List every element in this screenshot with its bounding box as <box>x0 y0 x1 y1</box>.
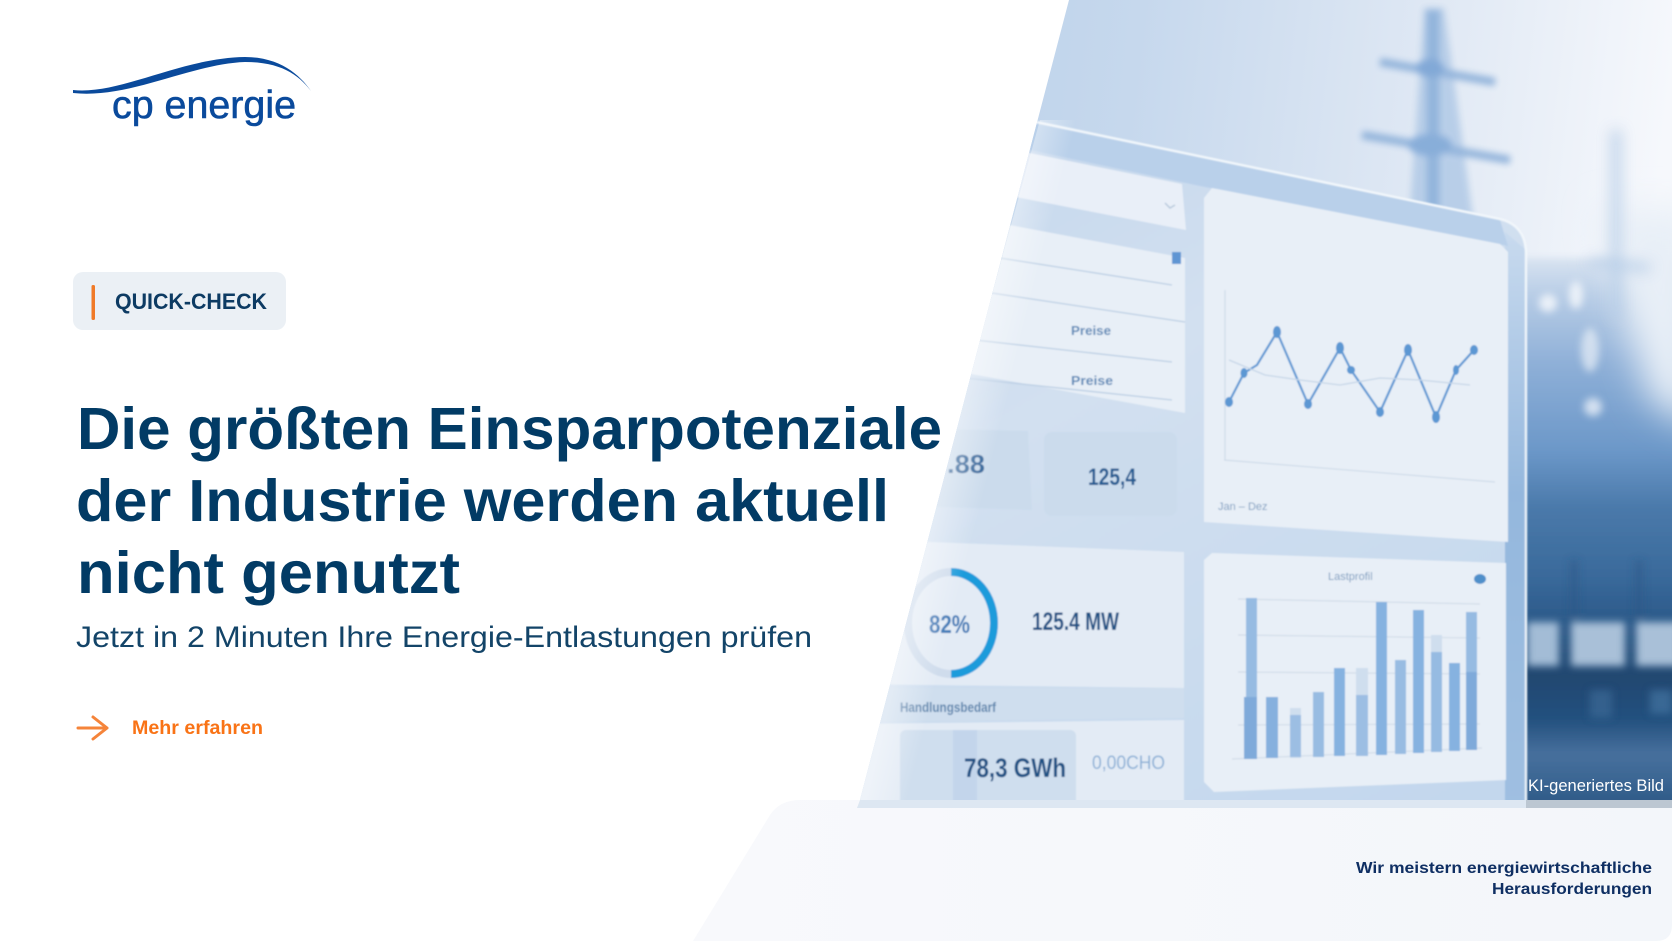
panel: gauge <box>890 542 1184 688</box>
chart title: Lastprofil <box>1328 571 1373 583</box>
panel: top left <box>1018 152 1186 230</box>
gauge ring <box>908 572 994 674</box>
dashboard <box>840 118 1526 812</box>
left edge fade <box>860 120 1062 800</box>
panel: list <box>972 224 1186 413</box>
title: nicht genutzt <box>77 540 460 606</box>
screen highlight edge <box>1036 122 1526 812</box>
photo bottom translucent strip <box>857 800 1672 808</box>
chart toggle <box>1474 574 1486 584</box>
metric: power: 125.4 MW <box>1032 608 1119 636</box>
title: Die größten Einsparpotenziale <box>77 396 942 462</box>
panel: list: Preise <box>1071 323 1111 338</box>
bars <box>1244 598 1477 759</box>
gauge value: 82% <box>929 611 970 639</box>
tile: metric .88 <box>948 454 986 474</box>
panel: bottom metric: 0,00CHO <box>1092 753 1165 774</box>
badge accent <box>92 285 95 320</box>
title <box>76 396 942 606</box>
panel: line chart <box>1204 188 1508 542</box>
badge label: QUICK-CHECK <box>115 289 267 314</box>
chart footer: Jan – Dez <box>1218 501 1268 513</box>
badge: quick-check <box>73 272 286 330</box>
tile: metric .88: .88 <box>947 449 985 479</box>
section strip: bottom <box>900 702 996 716</box>
logo swoosh <box>73 57 311 94</box>
photo: dashboard and power pylons <box>840 0 1672 820</box>
caption: image credit: KI-generiertes Bild <box>1528 776 1664 795</box>
sky <box>850 0 1672 820</box>
panel: list: Preise <box>1071 373 1113 388</box>
subtitle: Jetzt in 2 Minuten Ihre Energie-Entlastungen prüfen <box>76 621 812 654</box>
tagline: Wir meistern energiewirtschaftliche <box>1356 860 1652 877</box>
tagline <box>1356 860 1652 898</box>
tagline: Herausforderungen <box>1492 881 1652 898</box>
screen frame <box>888 150 1524 800</box>
right background: industrial scene <box>1500 210 1672 818</box>
tile: metric 125,4: 125,4 <box>1088 464 1137 491</box>
title: der Industrie werden aktuell <box>76 468 889 534</box>
line chart series <box>1225 326 1478 423</box>
metric: energy: 78,3 GWh <box>964 753 1066 783</box>
icon: power pylon main <box>1362 8 1510 240</box>
screen side bezel <box>1505 232 1526 812</box>
logo: cp energie <box>73 57 311 127</box>
tile: metric 125,4 <box>1088 467 1137 490</box>
panel: bottom metric <box>860 720 1184 800</box>
logo wordmark: cp energie <box>112 84 296 127</box>
screen top strip <box>1030 122 1508 246</box>
icon: power pylon far <box>1590 130 1650 320</box>
panel: bar chart <box>1204 553 1506 792</box>
bottom panel <box>693 800 1672 941</box>
section strip: bottom: Handlungsbedarf <box>900 699 996 715</box>
icon: arrow <box>78 717 107 739</box>
link: mehr erfahren: Mehr erfahren <box>132 718 263 739</box>
